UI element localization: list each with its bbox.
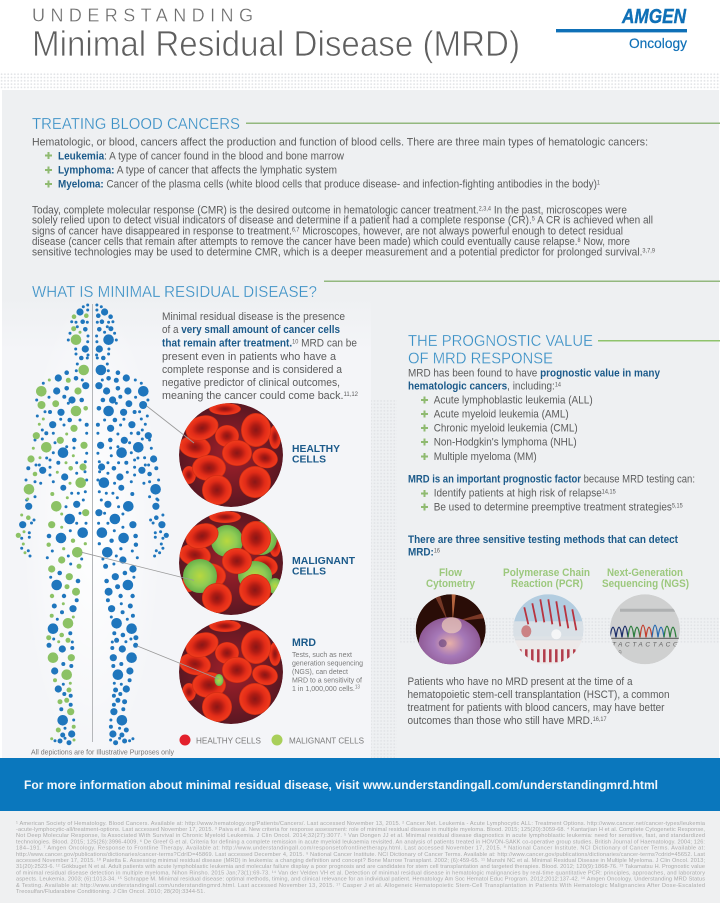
text block: complete molecular response: 6,7 (292, 227, 300, 233)
text block: HSCT outcomes: 16,17 (593, 717, 607, 723)
text block: MRD definition: negative predictor of clinical outcomes, (162, 377, 340, 389)
text block: HSCT outcomes: outcomes than those who still have MRD. (408, 715, 610, 727)
label: MRD with description: Tests, such as next (292, 650, 353, 659)
body figure made of blue and green cell dots (16, 304, 169, 745)
text block: testing methods intro: 16 (434, 549, 441, 555)
heading: prognostic value (408, 333, 720, 368)
heading: treating blood cancers: TREATING BLOOD CANCERS (32, 116, 240, 133)
footer references: Not Deep Molecular Response, Is Associated With Survival in Chronic Myeloid Leukemia. J Clin Oncol. 2014;32(27):3077. ⁵ Van Dongen JJ et al. Minimal residual disease diagnostics in acute lymphoblastic leukemia: need for sensitive, fast, and standardized (16, 832, 705, 839)
label: MRD with description (292, 637, 363, 693)
method: PCR: Polymerase Chain (503, 567, 590, 579)
text block: testing methods intro: There are three sensitive testing methods that can detect (408, 534, 678, 546)
photo: flow cytometry (416, 594, 486, 669)
photo: PCR (513, 594, 583, 664)
text block: important prognostic factor: Identify patients at high risk of relapse (434, 488, 615, 500)
text block: complete molecular response: In the past, microscopes were (491, 204, 627, 216)
logo: Amgen Oncology: Oncology (629, 35, 687, 51)
text block: blood cancer types (32, 136, 648, 191)
text block: MRD definition: 11,12 (343, 392, 359, 398)
text block: prognostic value: MRD has been found to have prognostic value in many (408, 368, 660, 380)
footer references: ¹ American Society of Hematology. Blood Cancers. Available at: http://www.hematology.org/Patients/Cancers/. Last accessed November 13, 2015. ² Cancer.Net. Leukemia - Acute Lymphocytic ALL: Treatment Options. http://www.cancer.net/cancer-types/leukemia (16, 821, 706, 827)
text block: HSCT outcomes (408, 676, 670, 727)
label: MRD with description: 1 in 1,000,000 cells. (292, 684, 360, 693)
text block: complete molecular response: Microscopes, however, are not always powerful enough to detect residual (299, 225, 623, 237)
title (32, 6, 520, 64)
label: MRD with description: 13 (355, 684, 360, 690)
text block: complete molecular response: 5 (532, 217, 535, 223)
text block: complete molecular response: 8 (578, 238, 581, 244)
label: healthy cells (292, 443, 340, 466)
list: hematologic cancers: Acute lymphoblastic leukemia (ALL) (434, 395, 593, 407)
text block: prognostic value: hematologic cancers, including: (408, 380, 559, 392)
photo: NGS: TACTACTACG (612, 641, 678, 648)
label: MRD with description: (NGS), can detect (292, 667, 349, 676)
list: hematologic cancers: Chronic myeloid leukemia (CML) (434, 423, 578, 435)
text block: MRD definition: of a very small amount of cancer cells (162, 324, 340, 336)
bullet: myeloma: Myeloma: Cancer of the plasma cells (white blood cells that produce disease- and infection-fighting antibodies in the body) (58, 179, 641, 191)
text block: complete molecular response: signs of cancer have disappeared in response to treatment. (32, 225, 316, 237)
text block: important prognostic factor: MRD is an important prognostic factor because MRD testing can: (408, 473, 695, 485)
header dotted band (0, 72, 720, 89)
title: Minimal Residual Disease (MRD) (32, 23, 520, 64)
footer references: technologies. Blood. 2015; 125(26):3996-4009. ⁶ De Greef G et al. Criteria for defining a complete remission in acute myeloid leukaemia revisited. An analysis of patients treated in HOVON-SAKK co-operative group studies. British Journal of Haematology. 2004; 126: (16, 838, 705, 845)
heading: prognostic value: THE PROGNOSTIC VALUE (408, 333, 593, 350)
footer references: 31(20):2523-6. ¹² Gökbuget N et al. Adult patients with acute lymphoblastic leukemia and molecular failure display a poor prognosis and are candidates for stem cell transplantation and targeted therapies. Blood. 2012; 120(9):1868-76. ¹³ Takamatsu H. Prognostic value (16, 864, 705, 870)
text block: testing methods intro (408, 534, 678, 559)
caption: illustrative purposes: All depictions are for Illustrative Purposes only (31, 748, 174, 756)
method: flow cytometry: Flow (439, 567, 462, 579)
footer references (0, 811, 720, 903)
text block: HSCT outcomes: hematopoietic stem-cell transplantation (HSCT), a common (408, 689, 670, 701)
heading: what is minimal residual disease: WHAT IS MINIMAL RESIDUAL DISEASE? (32, 284, 317, 301)
footer references: accessed November 17, 2015. ¹⁰ Paietta E. Assessing minimal residual disease (MRD) in leukemia: a changing definition and concept? Bone Marrow Transplant. 2002; (6):459-65. ¹¹ Munshi NC et al. Minimal Residual Disease in Multiple Myeloma. J Clin Oncol. 2013; (16, 857, 705, 864)
text block: prognostic value (408, 368, 660, 392)
bullet: myeloma: 1 (597, 181, 601, 187)
text block: complete molecular response: sensitive technologies may be used to determine CMR, which is a deeper measurement and a potential predictor for prolonged survival. (32, 246, 680, 258)
photo: NGS (610, 594, 680, 664)
footer references: Treosulfan/Fludarabine Conditioning. J Clin Oncol. 2010; 28(20):3344-51. (16, 889, 205, 895)
text block: complete molecular response: Now, more (581, 236, 630, 248)
cell circle: malignant cells (177, 511, 283, 615)
footer references: & Testing. Available at: http://www.understandingall.com/understandingmrd.html. Last accessed November 13, 2015. ¹⁷ Casper J et al. Allogeneic Hematopoietic Stem-Cell Transplantation in Patients With Hematologic Malignancies After Dose-Escalated (16, 882, 705, 889)
text block: MRD definition: complete response and is considered a (162, 364, 342, 376)
text block: important prognostic factor: Be used to determine preemptive treatment strategies (434, 502, 691, 514)
text block: important prognostic factor: 5,15 (672, 504, 683, 510)
footer references: of minimal residual disease detection in multiple myeloma. Nihon Rinsho. 2015 Jan;73(1):69-73. ¹⁴ Van der Velden VH et al. Detection of minimal residual disease in hematologic malignancies by real-time quantitative PCR: principles, approaches, and laboratory (16, 869, 705, 876)
footer references: -acute-lymphocytic-all/treatment-options. Last accessed November 17, 2015. ³ Paiva et al. New criteria for response assessment: role of minimal residual disease in multiple myeloma. Blood. 2015; 125(20):3059-68. ⁴ Kantarjian H et al. Complete Cytogenetic Response, (16, 826, 705, 833)
photo: NGS: 19 (615, 650, 622, 656)
legend: MALIGNANT CELLS (289, 736, 364, 746)
text block: complete molecular response: 2,3,4 (479, 206, 492, 212)
method: flow cytometry: Cytometry (426, 578, 476, 590)
cell circle: healthy cells (177, 403, 283, 507)
text block: complete molecular response: 3,7,9 (642, 248, 656, 254)
light backdrop behind body figure (2, 296, 371, 758)
title: UNDERSTANDING (32, 6, 253, 26)
text block: MRD definition (162, 311, 359, 402)
text block: MRD definition: that remain after treatment. (162, 338, 292, 350)
label: healthy cells: HEALTHY (292, 443, 340, 455)
banner: more information: For more information about minimal residual disease, visit www.understandingall.com/understandingmrd.html (24, 778, 658, 792)
method: PCR: Reaction (PCR) (511, 578, 583, 590)
footer references: http://www.cancer.gov/publications/dictionaries/cancer-terms?CdrID=45869. Last accessed December 4, 2015. ⁹ National Cancer Institute. NCI Dictionary of Cancer Terms. Available at: http://www.cancer.gov/publications/dictionaries/cancer-terms?cdrid=45652. Last (16, 851, 705, 858)
text block: complete molecular response: disease (cancer cells that remain after attempts to remove the cancer have been made) which could eventually cause relapse. (32, 236, 635, 248)
list: hematologic cancers: Multiple myeloma (MM) (434, 451, 537, 463)
text block: complete molecular response: Today, complete molecular response (CMR) is the desired outcome in hematologic cancer treatment. (32, 204, 513, 216)
text block: HSCT outcomes: Patients who have no MRD present at the time of a (408, 676, 633, 688)
method: NGS (602, 567, 689, 664)
label: malignant cells: MALIGNANT (292, 555, 356, 567)
text block: complete molecular response: solely relied upon to detect visual indicators of disease and determine if a patient had a complete response (CR). (32, 215, 570, 227)
glow behind body figure (22, 295, 162, 765)
text block: important prognostic factor: 14,15 (602, 490, 616, 496)
list: hematologic cancers (421, 395, 593, 463)
bullet: lymphoma: Lymphoma: A type of cancer that affects the lymphatic system (58, 165, 337, 177)
text block: MRD definition: Minimal residual disease is the presence (162, 311, 345, 323)
bullet: leukemia: Leukemia: A type of cancer found in the blood and bone marrow (58, 150, 344, 162)
footer references: aspects. Leukemia. 2003; (6):1013-34. ¹⁵ Schrappe M. Minimal residual disease: optimal methods, timing, and clinical relevance for an individual patient. Hematology Am Soc Hematol Educ Program. 2012;2012:137-42. ¹⁶ Amgen Oncology. Understanding MRD Status (16, 876, 705, 883)
text block: prognostic value: 14 (555, 382, 562, 388)
method: NGS: Next-Generation (607, 567, 683, 579)
heading: prognostic value: OF MRD RESPONSE (408, 351, 553, 368)
method: flow cytometry (416, 567, 486, 669)
text block: MRD definition: meaning the cancer could come back. (162, 390, 344, 402)
label: MRD with description: MRD to a sensitivity of (292, 676, 363, 685)
list: hematologic cancers: Acute myeloid leukemia (AML) (434, 408, 569, 420)
text block: complete molecular response: A CR is achieved when all (535, 215, 653, 227)
dotted band behind method photos (400, 617, 720, 644)
footer references: 184–191. ⁷ Amgen Oncology. Response to Frontline Therapy. Available at: http://www.understandingall.com/responsetofrontlinetherapy.html. Last accessed November 17, 2015. ⁸ National Cancer Institute. NCI Dictionary of Cancer Terms. Available at: (16, 845, 705, 852)
logo: Amgen Oncology: AMGEN (621, 6, 686, 28)
label: malignant cells: CELLS (292, 566, 326, 578)
label: healthy cells: CELLS (292, 454, 326, 466)
text block: blood cancer types: Hematologic, or blood, cancers affect the production and function of blood cells. There are three main types of hematologic cancers: (32, 136, 648, 148)
legend (180, 734, 364, 746)
banner: more information (0, 758, 720, 811)
method: NGS: Sequencing (NGS) (602, 578, 689, 590)
text block: MRD definition: present even in patients who have a (162, 351, 336, 363)
cell circle: MRD (177, 620, 283, 724)
text block: HSCT outcomes: treatment for patients with blood cancers, may have better (408, 702, 665, 714)
label: MRD with description: MRD (292, 637, 316, 649)
text block: MRD definition: 10 (292, 340, 299, 346)
method: PCR (503, 567, 590, 664)
dotted strip beside cell labels (371, 400, 397, 758)
callout lines from body to cell circles (82, 406, 219, 679)
main grey panel (2, 90, 719, 758)
label: MRD with description: generation sequencing (292, 658, 363, 668)
text block: important prognostic factor (408, 473, 695, 514)
text block: complete molecular response (32, 204, 656, 258)
logo: Amgen Oncology (556, 6, 687, 51)
label: malignant cells (292, 555, 356, 578)
list: hematologic cancers: Non-Hodgkin's lymphoma (NHL) (434, 437, 577, 449)
legend: HEALTHY CELLS (196, 736, 261, 746)
text block: testing methods intro: MRD: (408, 547, 434, 559)
text block: MRD definition: MRD can be (298, 338, 357, 350)
